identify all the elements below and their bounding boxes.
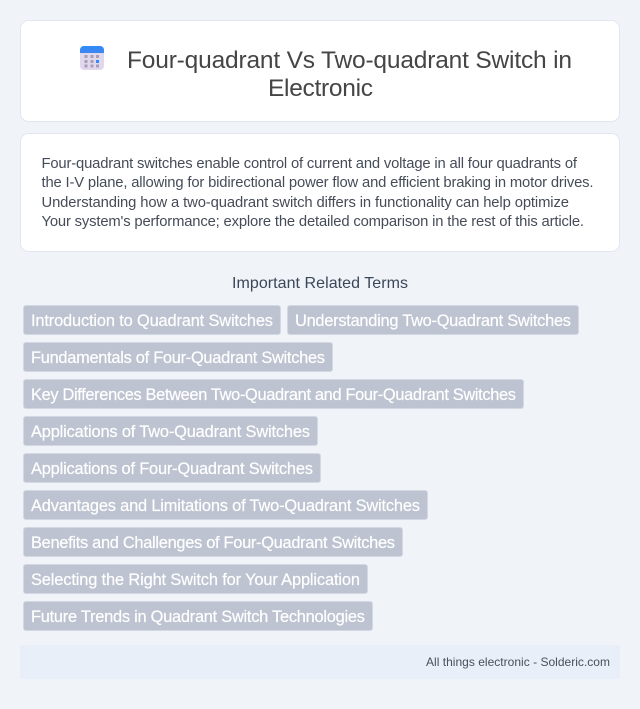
tag 5: [24, 416, 318, 446]
panel: description: [20, 134, 620, 252]
tag 5: Applications of Two-Quadrant Switches: [31, 423, 310, 441]
tag 10: [24, 602, 372, 630]
description text: Four-quadrant switches enable control of current and voltage in all four quadrants of: [42, 156, 578, 172]
tag 10: Future Trends in Quadrant Switch Technologies: [31, 608, 365, 626]
tag 6: Applications of Four-Quadrant Switches: [31, 460, 313, 478]
tag 2: Understanding Two-Quadrant Switches: [295, 312, 571, 330]
title panel: [20, 20, 620, 122]
tag 9: [24, 564, 368, 594]
tag 7: Advantages and Limitations of Two-Quadrant Switches: [31, 497, 420, 515]
panel: related term tags: [24, 306, 578, 630]
title: [127, 47, 572, 102]
tag 6: [24, 454, 320, 482]
tag 4: [24, 380, 524, 408]
icon: calendar: [80, 46, 104, 70]
tag 2: [288, 306, 578, 334]
description text: Understanding how a two-quadrant switch differs in functionality can help optimize: [42, 195, 569, 211]
heading: important related terms: Important Related Terms: [232, 275, 408, 292]
title: Four-quadrant Vs Two-quadrant Switch in: [127, 47, 572, 74]
tag 8: [24, 528, 402, 556]
description text: [42, 156, 594, 230]
tag 1: [24, 306, 280, 334]
title: Electronic: [268, 75, 373, 102]
description text: the I-V plane, allowing for bidirectional power flow and efficient braking in motor drives.: [42, 175, 594, 191]
tag 3: Fundamentals of Four-Quadrant Switches: [31, 349, 325, 367]
tag 3: [24, 342, 332, 372]
tag 7: [24, 490, 428, 520]
description text: Your system's performance; explore the detailed comparison in the rest of this article.: [42, 214, 584, 230]
footer: [20, 645, 620, 679]
tag 4: Key Differences Between Two-Quadrant and Four-Quadrant Switches: [31, 386, 516, 404]
tag 9: Selecting the Right Switch for Your Application: [31, 571, 360, 589]
tag 1: Introduction to Quadrant Switches: [31, 312, 273, 330]
footer text: All things electronic - Solderic.com: [426, 655, 610, 669]
tag 8: Benefits and Challenges of Four-Quadrant Switches: [31, 534, 395, 552]
